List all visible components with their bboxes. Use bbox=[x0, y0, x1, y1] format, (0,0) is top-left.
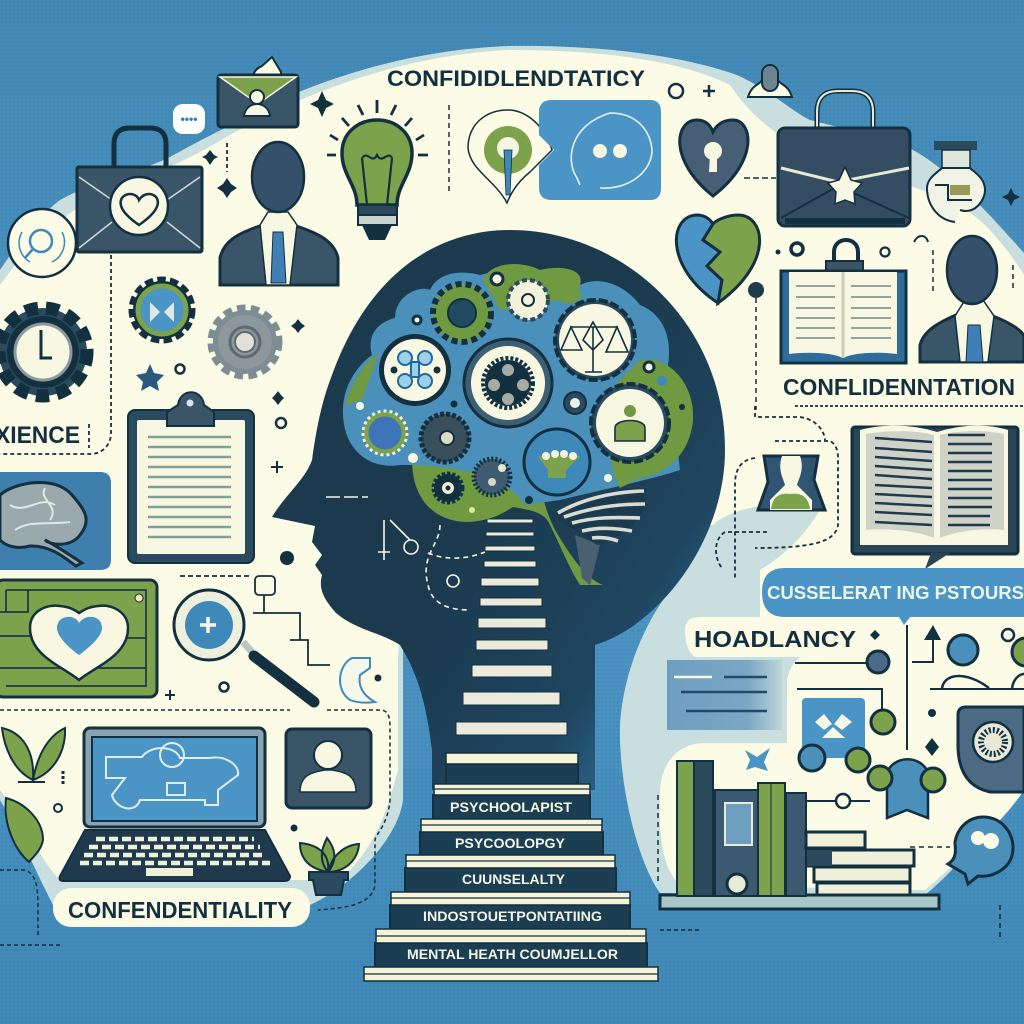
staircase bbox=[364, 519, 658, 981]
tread mid lines bbox=[364, 789, 658, 974]
dotted rule bbox=[795, 405, 1024, 407]
heading: hoadlancy: HOADLANCY bbox=[694, 626, 856, 652]
step labels: PSYCOOLOPGY bbox=[455, 835, 566, 851]
icon: broken heart bbox=[676, 215, 760, 303]
marks on face bbox=[326, 497, 485, 610]
icon: leaf pair bbox=[2, 728, 65, 782]
head silhouette bbox=[272, 230, 725, 790]
brain left green lobe bbox=[345, 355, 378, 405]
flowchart nodes bbox=[745, 625, 1014, 818]
icon: jar bbox=[927, 141, 985, 222]
small rings row bbox=[748, 236, 928, 298]
person circle bbox=[591, 384, 669, 462]
dashed connectors portrait bbox=[716, 406, 838, 580]
icons: small circle and plus bbox=[669, 84, 715, 98]
icon: magnifier circle bbox=[8, 209, 76, 277]
icon: small blue gear bbox=[133, 281, 191, 339]
step labels: MENTAL HEATH COUMJELLOR bbox=[407, 946, 618, 962]
upper steps bbox=[456, 519, 567, 735]
small ring bbox=[564, 392, 586, 414]
top green gear bbox=[433, 284, 491, 342]
icon: heart with keyhole bbox=[680, 120, 748, 196]
dots and plus bbox=[54, 551, 382, 832]
dashed connectors right bbox=[449, 105, 1013, 940]
icon: gray gear bbox=[213, 310, 277, 374]
brain blue bbox=[343, 270, 680, 505]
panel: brain icon bbox=[0, 472, 111, 570]
icon: blue chat panel bbox=[539, 100, 661, 200]
icon: crescent bbox=[340, 658, 375, 703]
brain dots bbox=[356, 273, 654, 513]
icon: star bbox=[136, 364, 164, 391]
brain dark dots bbox=[450, 376, 685, 504]
title top: CONFIDIDLENDTATICY bbox=[387, 66, 645, 91]
panel: green heart bbox=[0, 580, 157, 697]
icon: briefcase with heart bbox=[77, 128, 202, 252]
icon: small envelope bbox=[218, 57, 298, 127]
brain top green bbox=[483, 264, 582, 310]
icon: laptop bbox=[60, 728, 290, 881]
brain right green lobe bbox=[607, 359, 693, 488]
icon: person right bbox=[920, 236, 1024, 362]
icon: potted plant bbox=[300, 838, 359, 895]
wing tail bbox=[575, 535, 600, 585]
banner: counselling bbox=[762, 568, 1024, 625]
banner: counselling: CUSSELERAT ING PSTOURS bbox=[767, 583, 1024, 603]
note panel with arrows bbox=[667, 660, 782, 730]
icon: dark briefcase bbox=[778, 91, 910, 226]
icon: open book small bbox=[781, 271, 906, 363]
dashed heart connector bbox=[744, 177, 776, 179]
icon: speech dots: •••• bbox=[181, 112, 197, 126]
central gear circle bbox=[464, 339, 552, 427]
icon: leaf lower bbox=[6, 798, 43, 862]
heading: confidentiality right: CONFLIDENNTATION bbox=[783, 374, 1015, 400]
icon: magnifier bbox=[174, 590, 314, 702]
icon: location pin bbox=[468, 110, 552, 203]
step treads bbox=[364, 753, 658, 981]
icon: person in suit bbox=[220, 142, 338, 285]
icon: light bulb bbox=[327, 100, 428, 240]
icon: person frame bbox=[286, 729, 371, 808]
molecule gear circle bbox=[379, 334, 451, 406]
icon: people on line bbox=[930, 635, 1024, 689]
brain lower green lobe bbox=[412, 460, 603, 585]
icon: clipboard bbox=[128, 392, 254, 563]
scales circle bbox=[555, 300, 635, 380]
icon: large open book bbox=[852, 426, 1018, 569]
step labels: CUUNSELALTY bbox=[462, 871, 566, 887]
icon: portrait frame bbox=[758, 456, 825, 510]
gear with eye bbox=[434, 474, 462, 502]
icon: speech dots bbox=[173, 104, 205, 134]
label pill left bbox=[53, 888, 310, 927]
step risers bbox=[375, 764, 647, 968]
icon: little person bbox=[748, 65, 792, 97]
cream backdrop lower right bbox=[660, 617, 1024, 890]
bookshelf bbox=[660, 761, 939, 909]
brain with gears bbox=[343, 264, 693, 585]
icon: padlock bbox=[826, 240, 863, 273]
step labels bbox=[407, 799, 618, 962]
dark gear bbox=[421, 414, 469, 462]
heading: confidentiality left: CONFENDENTIALITY bbox=[68, 897, 292, 923]
step labels: INDOSTOUETPONTATIING bbox=[423, 908, 602, 924]
flowchart small bbox=[180, 576, 330, 665]
dashed connectors left bbox=[0, 143, 227, 454]
white gear bbox=[508, 280, 548, 320]
small markers bbox=[870, 630, 939, 756]
icon: fingerprint shield bbox=[958, 707, 1024, 792]
icon: gear clock bbox=[0, 308, 87, 396]
dashed connectors left lower bbox=[0, 710, 700, 1024]
wing bbox=[553, 488, 647, 545]
icon: sparkles bbox=[202, 91, 334, 405]
icon: chat bubble bbox=[948, 817, 1013, 884]
icon: small rings bbox=[176, 364, 286, 473]
icon: sparkle right bbox=[1002, 188, 1020, 206]
step labels: PSYCHOOLAPIST bbox=[450, 799, 572, 815]
blue hand circle bbox=[524, 429, 590, 495]
small green-blue gear bbox=[363, 411, 407, 455]
fuzzy gear bbox=[474, 459, 510, 495]
